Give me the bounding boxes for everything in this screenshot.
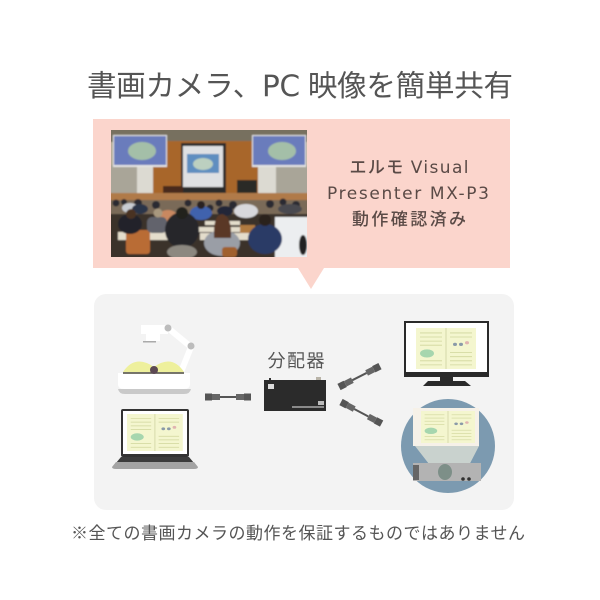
callout text <box>327 158 489 229</box>
label: splitter: 分配器 <box>268 351 324 371</box>
callout text: Presenter MX-P3 <box>327 184 489 204</box>
icon: splitter box <box>264 377 326 411</box>
callout text: 動作確認済み <box>352 210 466 229</box>
panel: pink callout <box>93 119 510 289</box>
panel: connection diagram <box>94 294 514 510</box>
arrow: output cable to projector <box>339 399 383 427</box>
arrow: output cable to monitor <box>337 363 382 390</box>
icon: document camera <box>118 324 194 394</box>
callout text: エルモ Visual <box>350 158 468 178</box>
icon: laptop <box>112 409 198 469</box>
footnote: ※全ての書画カメラの動作を保証するものではありません <box>71 524 525 543</box>
title: 書画カメラ、PC 映像を簡単共有 <box>87 69 513 103</box>
icon: monitor <box>404 321 489 386</box>
icon: projector <box>401 399 495 493</box>
photo: conference hall <box>111 130 307 257</box>
arrow: input cable <box>205 394 251 400</box>
